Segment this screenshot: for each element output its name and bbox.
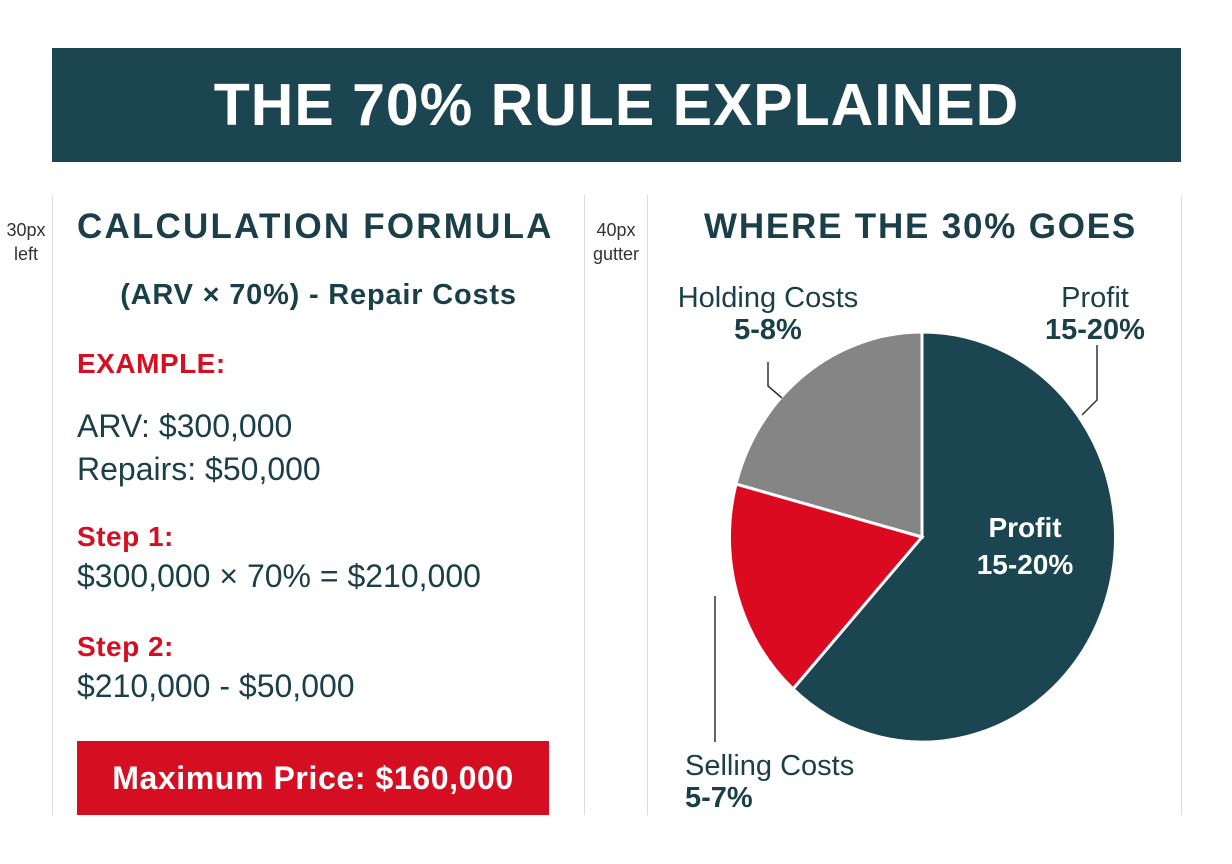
heading: WHERE THE 30% GOES xyxy=(704,207,1137,246)
label: selling costs: Selling Costs xyxy=(685,750,854,782)
annotation: 40px gutter: 40px xyxy=(596,220,636,240)
annotation: 30px left: 30px xyxy=(6,220,46,240)
annotation: 40px gutter xyxy=(593,220,639,264)
formula: (ARV × 70%) - Repair Costs xyxy=(120,279,517,311)
step 1: $300,000 × 70% = $210,000 xyxy=(77,558,481,594)
result box xyxy=(77,741,549,815)
title bar xyxy=(52,48,1181,162)
label: holding costs xyxy=(678,282,858,346)
label: holding costs: Holding Costs xyxy=(678,282,858,314)
pie chart: Profit xyxy=(988,512,1062,543)
step 2: Step 2: xyxy=(77,631,174,662)
pie chart: 15-20% xyxy=(977,549,1073,580)
annotation: 30px left: left xyxy=(14,244,38,264)
title bar: THE 70% RULE EXPLAINED xyxy=(214,72,1019,138)
label: profit xyxy=(1045,282,1145,346)
heading: CALCULATION FORMULA xyxy=(77,207,554,246)
example label: EXAMPLE: xyxy=(77,348,226,379)
label: holding costs: 5-8% xyxy=(734,314,802,346)
example values: ARV: $300,000 xyxy=(77,408,292,444)
annotation: 30px left xyxy=(6,220,46,264)
example values xyxy=(77,408,321,487)
label: selling costs: 5-7% xyxy=(685,782,753,814)
label: profit: 15-20% xyxy=(1045,314,1145,346)
step 1 xyxy=(77,521,481,594)
step 2: $210,000 - $50,000 xyxy=(77,668,355,704)
step 2 xyxy=(77,631,355,704)
label: selling costs xyxy=(685,750,854,814)
annotation: 40px gutter: gutter xyxy=(593,244,639,264)
example values: Repairs: $50,000 xyxy=(77,451,321,487)
panel: calculation formula xyxy=(77,207,554,815)
step 1: Step 1: xyxy=(77,521,174,552)
label: profit: Profit xyxy=(1061,282,1129,314)
result box: Maximum Price: $160,000 xyxy=(112,760,514,796)
